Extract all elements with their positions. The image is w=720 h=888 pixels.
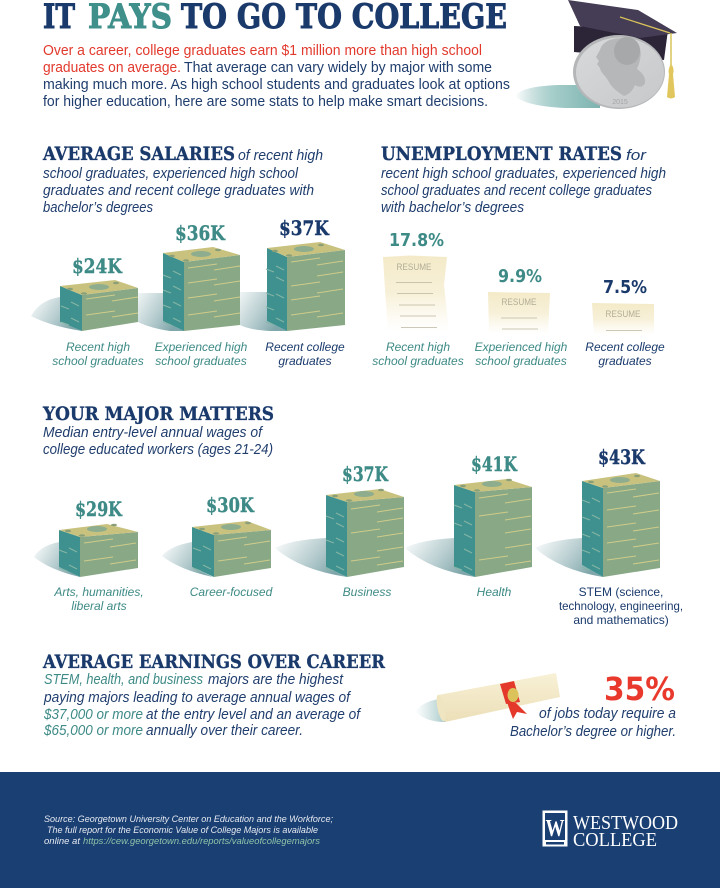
label: health: Health	[477, 585, 512, 599]
label: STEM: and mathematics)	[573, 613, 669, 627]
heading: average salaries	[42, 143, 323, 216]
earnings text block: STEM, health, and business	[44, 672, 203, 688]
label: STEM	[559, 585, 683, 627]
logo: Westwood College: W	[546, 816, 564, 842]
icon: diploma	[415, 673, 560, 722]
logo: Westwood College: WESTWOOD	[573, 812, 678, 834]
label: recent high school graduates: school graduates	[52, 354, 144, 368]
panel: unemployment rates	[372, 143, 666, 368]
earnings text block: majors are the highest	[208, 672, 344, 688]
value: $37K: $37K	[342, 462, 388, 486]
icon: medium resume: RESUME	[502, 297, 536, 307]
value: $37K: $37K	[279, 216, 330, 240]
label: experienced high school graduates: school graduates	[155, 354, 247, 368]
label: recent college graduates: graduates	[598, 354, 652, 368]
earnings text block: at the entry level and an average of	[146, 707, 362, 723]
label: experienced high school graduates: Experienced high	[475, 340, 568, 354]
icon: coin with graduation cap	[515, 0, 677, 109]
intro paragraph: graduates on average.	[43, 60, 181, 76]
heading: your major matters: YOUR MAJOR MATTERS	[42, 403, 274, 425]
source text	[44, 814, 333, 846]
label: recent college graduates	[265, 340, 345, 368]
value: $24K: $24K	[72, 254, 123, 278]
heading: your major matters: college educated workers (ages 21-24)	[43, 442, 273, 458]
heading: unemployment rates: UNEMPLOYMENT RATES	[381, 143, 622, 165]
heading: your major matters: Median entry-level annual wages of	[43, 425, 264, 441]
icon: long resume: RESUME	[396, 262, 432, 272]
label: experienced high school graduates	[475, 340, 568, 368]
source text: Source: Georgetown University Center on Education and the Workforce;	[44, 814, 333, 824]
heading: unemployment rates: recent high school graduates, experienced high	[381, 166, 666, 182]
earnings text block: $37,000 or more	[43, 707, 143, 723]
label: recent college graduates	[585, 340, 665, 368]
value: 7.5%: 7.5%	[603, 277, 647, 298]
label: recent college graduates: Recent college	[265, 340, 345, 354]
label: arts, humanities, liberal arts	[53, 585, 144, 613]
bar: $24K money stack	[60, 280, 138, 331]
value: 17.8%: 17.8%	[389, 230, 444, 251]
heading: unemployment rates: with bachelor’s degrees	[381, 200, 524, 216]
footer band	[0, 772, 720, 888]
heading: average salaries: graduates and recent college graduates with	[43, 183, 314, 199]
stack shadows	[34, 538, 603, 577]
intro paragraph: making much more. As high school students and graduates look at options	[43, 77, 510, 93]
bar: $41K money stack	[454, 479, 532, 577]
bar: $29K money stack	[59, 524, 138, 577]
heading: average salaries: AVERAGE SALARIES	[42, 143, 235, 165]
callout: 35%: Bachelor’s degree or higher.	[510, 724, 676, 740]
source text: The full report for the Economic Value of College Majors is available	[47, 825, 318, 835]
label: recent college graduates: Recent college	[585, 340, 665, 354]
source text: https://cew.georgetown.edu/reports/valueofcollegemajors	[83, 836, 321, 846]
bar: $36K money stack	[163, 247, 240, 331]
bar: $30K money stack	[192, 521, 271, 577]
label: experienced high school graduates: school graduates	[475, 354, 567, 368]
label: arts, humanities, liberal arts: Arts, humanities,	[53, 585, 144, 599]
intro paragraph: That average can vary widely by major with some	[184, 60, 492, 76]
heading: average earnings over career: AVERAGE EARNINGS OVER CAREER	[42, 651, 385, 673]
heading: average salaries: school graduates, experienced high school	[43, 166, 299, 182]
callout: 35%	[510, 670, 676, 740]
intro paragraph	[43, 43, 510, 110]
icon: coin with graduation cap: 2015	[612, 99, 628, 106]
label: business: Business	[343, 585, 391, 599]
heading: your major matters	[42, 403, 274, 458]
intro paragraph: for higher education, here are some stats to help make smart decisions.	[43, 94, 488, 110]
value: $29K: $29K	[75, 497, 122, 521]
icon: medium resume	[488, 292, 550, 334]
label: STEM: STEM (science,	[579, 585, 663, 599]
value: $43K: $43K	[598, 445, 645, 469]
value: $30K: $30K	[206, 493, 254, 517]
bar: $43K money stack	[582, 473, 660, 577]
heading: unemployment rates: for	[626, 148, 647, 164]
title	[43, 0, 507, 37]
logo: Westwood College: COLLEGE	[573, 829, 657, 851]
value: $41K: $41K	[471, 452, 517, 476]
bar: $37K money stack	[326, 489, 404, 577]
label: career-focused: Career-focused	[190, 585, 273, 599]
logo: Westwood College	[542, 810, 678, 851]
icon: short resume: RESUME	[606, 309, 640, 319]
label: recent high school graduates: school graduates	[372, 354, 464, 368]
value: $36K: $36K	[175, 221, 226, 245]
panel: your major matters	[34, 403, 683, 627]
stack shadows	[31, 292, 287, 331]
earnings text block: annually over their career.	[146, 723, 303, 739]
label: arts, humanities, liberal arts: liberal arts	[71, 599, 127, 613]
label: recent college graduates: graduates	[278, 354, 332, 368]
label: recent high school graduates	[372, 340, 464, 368]
source text: online at	[44, 836, 81, 846]
earnings text block: paying majors leading to average annual wages of	[43, 690, 352, 706]
label: experienced high school graduates: Experienced high	[155, 340, 248, 354]
earnings text block	[43, 672, 362, 739]
bar: $37K money stack	[266, 242, 345, 331]
heading: average salaries: of recent high	[238, 148, 323, 164]
label: STEM: technology, engineering,	[559, 599, 683, 613]
panel: average salaries	[31, 143, 345, 368]
heading: unemployment rates: school graduates and recent college graduates	[381, 183, 652, 199]
icon: long resume	[383, 256, 449, 331]
label: recent high school graduates: Recent high	[66, 340, 130, 354]
callout: 35%: of jobs today require a	[539, 706, 676, 722]
panel: average earnings over career	[42, 651, 676, 740]
heading: average salaries: bachelor’s degrees	[43, 200, 153, 216]
label: experienced high school graduates	[155, 340, 248, 368]
earnings text block: $65,000 or more	[43, 723, 143, 739]
callout: 35%: 35%	[604, 670, 675, 708]
label: recent high school graduates: Recent high	[386, 340, 450, 354]
icon: short resume	[592, 303, 654, 335]
value: 9.9%: 9.9%	[498, 266, 542, 287]
intro paragraph: Over a career, college graduates earn $1 million more than high school	[43, 43, 482, 59]
label: recent high school graduates	[52, 340, 144, 368]
heading: unemployment rates	[381, 143, 666, 216]
